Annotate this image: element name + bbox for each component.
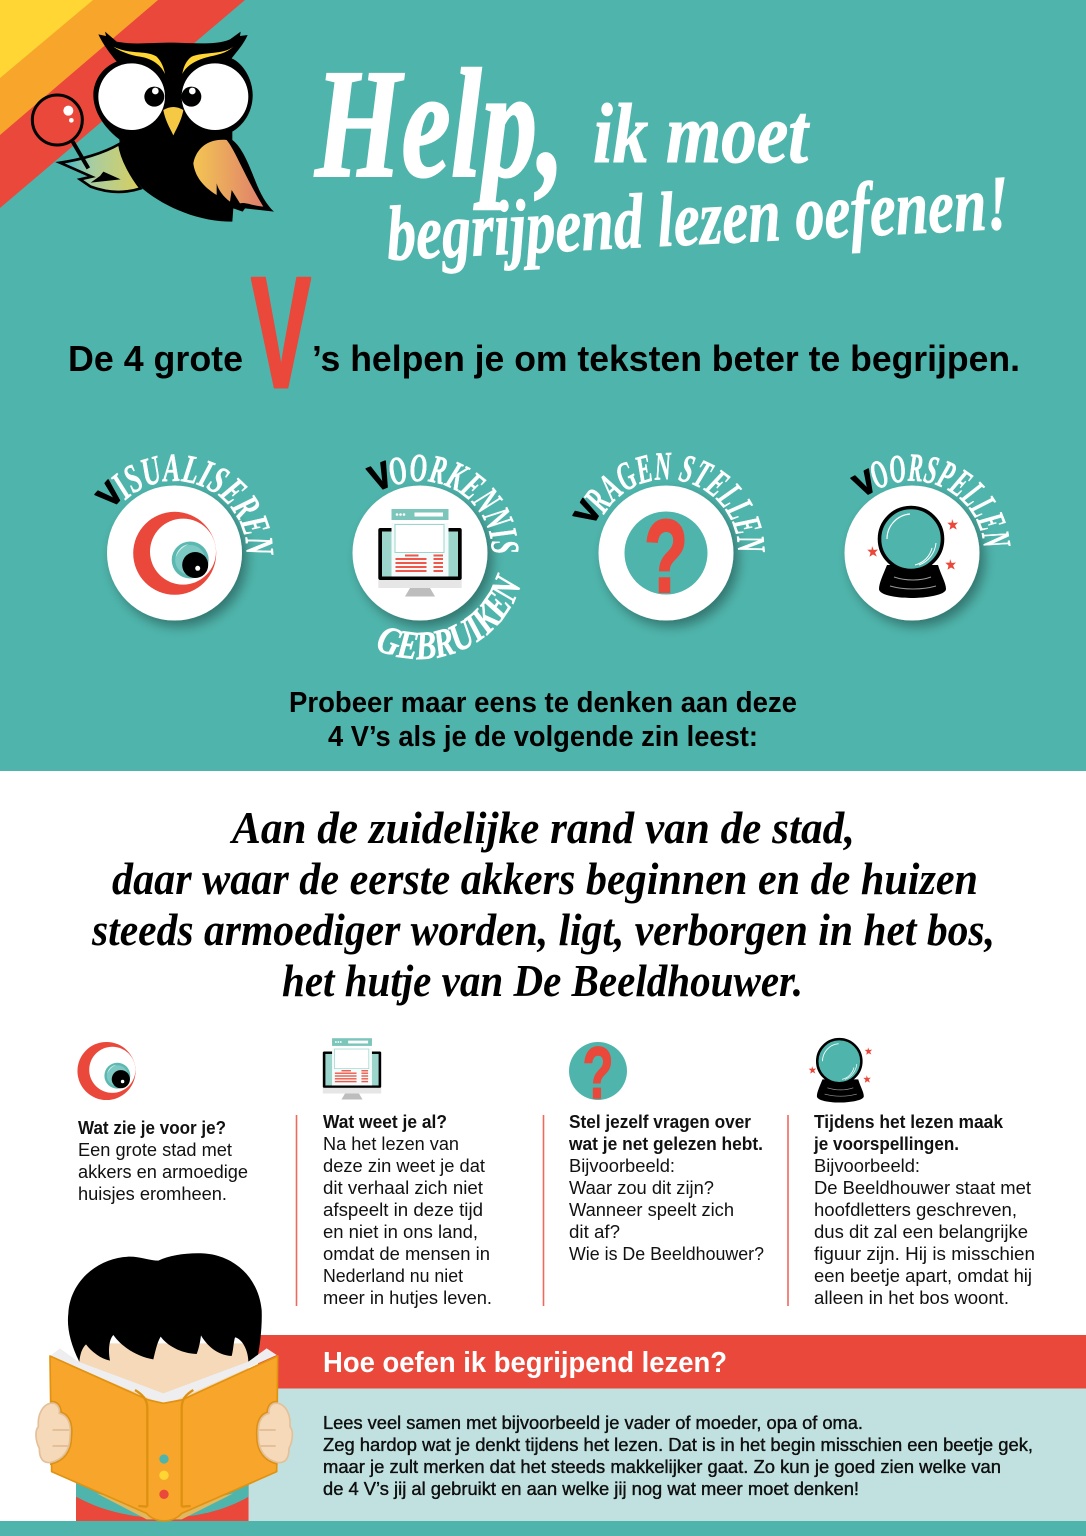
column 3: vragen: Wie is De Beeldhouwer? bbox=[569, 1244, 764, 1264]
column 3: vragen: Bijvoorbeeld: bbox=[569, 1156, 675, 1176]
column 4: voorspellingen: hoofdletters geschreven, bbox=[814, 1200, 1017, 1220]
column 4: voorspellingen: je voorspellingen. bbox=[813, 1134, 959, 1154]
example sentence: het hutje van De Beeldhouwer. bbox=[282, 955, 803, 1006]
column 4: voorspellingen bbox=[809, 1039, 1035, 1308]
column 3: vragen: wat je net gelezen hebt. bbox=[568, 1134, 763, 1154]
tips text bbox=[323, 1413, 1033, 1499]
example sentence: steeds armoediger worden, ligt, verborgen in het bos, bbox=[91, 904, 995, 955]
example sentence: daar waar de eerste akkers beginnen en de huizen bbox=[112, 853, 978, 904]
column 4: voorspellingen: dus dit zal een belangrijke bbox=[814, 1222, 1028, 1242]
icon group: voorkennis gebruiken bbox=[351, 453, 520, 660]
example sentence: Aan de zuidelijke rand van de stad, bbox=[229, 802, 855, 853]
bottom strip bbox=[0, 1521, 1086, 1536]
subtitle: de 4 grote V's: De 4 grote bbox=[68, 338, 243, 379]
column 1: wat zie je voor je: Een grote stad met bbox=[78, 1140, 232, 1160]
intro sentence bbox=[289, 687, 797, 753]
column 2: wat weet je al: en niet in ons land, bbox=[323, 1222, 478, 1242]
header background bbox=[0, 0, 1086, 771]
column 3: vragen: Waar zou dit zijn? bbox=[569, 1178, 714, 1198]
example sentence bbox=[91, 802, 995, 1006]
icon: monitor bbox=[323, 1038, 381, 1099]
title bbox=[314, 37, 1011, 277]
column 1: wat zie je voor je: huisjes eromheen. bbox=[78, 1184, 227, 1204]
tips text: Lees veel samen met bijvoorbeeld je vader of moeder, opa of oma. bbox=[323, 1413, 863, 1433]
icon group: voorspellen: V bbox=[848, 462, 883, 504]
icon: crystal ball bbox=[809, 1039, 872, 1102]
icon group: voorkennis gebruiken: V bbox=[363, 453, 398, 499]
column 1: wat zie je voor je: akkers en armoedige bbox=[78, 1162, 248, 1182]
icon group: vragen stellen: ? bbox=[644, 499, 688, 615]
column 4: voorspellingen: figuur zijn. Hij is misschien bbox=[814, 1244, 1035, 1264]
subtitle: de 4 grote V's: V bbox=[251, 245, 311, 421]
column 2: wat weet je al: afspeelt in deze tijd bbox=[323, 1200, 483, 1220]
icon group: voorkennis gebruiken: GEBRUIKEN bbox=[378, 572, 520, 660]
icon: eye bbox=[77, 1042, 136, 1100]
column 2: wat weet je al: Wat weet je al? bbox=[323, 1112, 447, 1132]
column 3: vragen: Stel jezelf vragen over bbox=[569, 1112, 751, 1132]
tips heading bar bbox=[258, 1335, 1086, 1388]
column 1: wat zie je voor je: Wat zie je voor je? bbox=[78, 1118, 226, 1138]
icon group: voorspellen bbox=[843, 454, 1011, 633]
tips heading bar: Hoe oefen ik begrijpend lezen? bbox=[323, 1347, 727, 1379]
column 4: voorspellingen: De Beeldhouwer staat met bbox=[814, 1178, 1031, 1198]
column 2: wat weet je al: Na het lezen van bbox=[323, 1134, 459, 1154]
tips text: de 4 V’s jij al gebruikt en aan welke jij nog wat meer moet denken! bbox=[323, 1479, 859, 1499]
column 4: voorspellingen: een beetje apart, omdat hij bbox=[814, 1266, 1032, 1286]
column 4: voorspellingen: Bijvoorbeeld: bbox=[814, 1156, 920, 1176]
column 3: vragen: dit af? bbox=[569, 1222, 620, 1242]
column 2: wat weet je al bbox=[323, 1038, 492, 1308]
column 3: vragen: Wanneer speelt zich bbox=[569, 1200, 734, 1220]
owl mascot with magnifying glass bbox=[32, 32, 274, 222]
corner stripes bbox=[0, 0, 245, 208]
column 2: wat weet je al: deze zin weet je dat bbox=[323, 1156, 485, 1176]
intro sentence: 4 V’s als je de volgende zin leest: bbox=[328, 721, 758, 753]
tips text: Zeg hardop wat je denkt tijdens het lezen. Dat is in het begin misschien een beetje gek, bbox=[323, 1435, 1033, 1455]
icon group: vragen stellen: V bbox=[567, 494, 608, 530]
subtitle: de 4 grote V's bbox=[68, 245, 1020, 421]
column 2: wat weet je al: dit verhaal zich niet bbox=[323, 1178, 483, 1198]
icon group: visualiseren: V bbox=[90, 475, 130, 514]
column 4: voorspellingen: Tijdens het lezen maak bbox=[814, 1112, 1004, 1132]
title: Help, bbox=[314, 37, 565, 210]
boy reading a book bbox=[36, 1253, 292, 1521]
intro sentence: Probeer maar eens te denken aan deze bbox=[289, 687, 797, 719]
column 4: voorspellingen: alleen in het bos woont. bbox=[814, 1288, 1009, 1308]
icon: question mark: ? bbox=[582, 1033, 614, 1114]
tips text: maar je zult merken dat het steeds makkelijker gaat. Zo kun je goed zien welke van bbox=[323, 1457, 1001, 1477]
icon group: visualiseren: ISUALISEREN bbox=[110, 454, 274, 555]
column 2: wat weet je al: Nederland nu niet bbox=[323, 1266, 463, 1286]
icon group: vragen stellen bbox=[567, 452, 765, 633]
column 2: wat weet je al: omdat de mensen in bbox=[323, 1244, 490, 1264]
icon group: visualiseren bbox=[90, 454, 274, 633]
tips panel background bbox=[249, 1388, 1086, 1522]
column 1: wat zie je voor je bbox=[77, 1042, 248, 1204]
icon group: voorkennis gebruiken: OORKENNIS bbox=[390, 454, 519, 553]
subtitle: de 4 grote V's: ’s helpen je om teksten beter te begrijpen. bbox=[312, 338, 1020, 379]
icon group: vragen stellen: RAGEN STELLEN bbox=[584, 452, 765, 552]
icon group: voorspellen: OORSPELLEN bbox=[870, 454, 1011, 546]
column 3: vragen bbox=[568, 1033, 764, 1264]
title: ik moet bbox=[593, 87, 810, 181]
column 2: wat weet je al: meer in hutjes leven. bbox=[323, 1288, 492, 1308]
